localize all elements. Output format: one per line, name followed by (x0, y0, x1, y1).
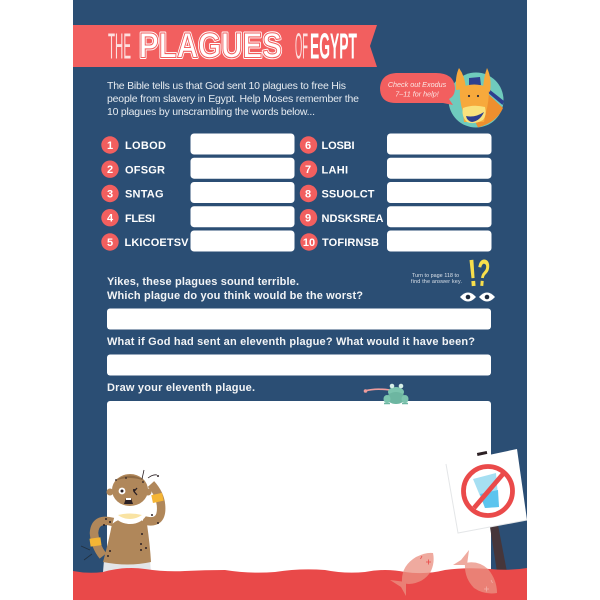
question three: Draw your eleventh plague. (107, 382, 255, 394)
word scramble left column: FLESI (125, 213, 155, 225)
intro text (107, 80, 359, 118)
word scramble left column: LKICOETSV (124, 237, 189, 249)
word scramble right column: LOSBI (322, 140, 354, 152)
intro text: people from slavery in Egypt. Help Moses remember the (107, 93, 359, 105)
word scramble right column: 8 (305, 188, 311, 200)
title banner: PLAGUES (139, 26, 282, 66)
callout: check out Exodus (380, 73, 455, 105)
icon: exclamation and question marks: ! (466, 253, 479, 295)
word scramble right column: 7 (305, 164, 311, 176)
word scramble left column: LOBOD (125, 140, 166, 152)
word scramble left column: OFSGR (125, 164, 165, 176)
word scramble right column (300, 134, 492, 252)
word scramble left column: 4 (107, 213, 114, 225)
icon: exclamation and question marks (466, 253, 492, 296)
word scramble right column: 6 (305, 140, 311, 152)
word scramble left column: 1 (107, 140, 113, 152)
question one: Which plague do you think would be the worst? (107, 290, 363, 302)
word scramble right column: SSUOLCT (322, 189, 375, 201)
character: man with boils (81, 470, 164, 572)
navy page panel (73, 0, 527, 600)
fish right (453, 550, 497, 593)
no water sign (446, 449, 527, 533)
answer key note: Turn to page 118 to (412, 273, 459, 279)
icon: exclamation and question marks: ? (475, 253, 492, 296)
word scramble right column: LAHI (322, 164, 348, 176)
title banner: EGYPT (310, 26, 357, 66)
callout: check out Exodus: Check out Exodus (388, 80, 447, 89)
word scramble left column (101, 134, 294, 252)
title banner: THE (108, 26, 131, 66)
answer box two (107, 354, 491, 376)
fish left (390, 553, 434, 596)
word scramble right column: 10 (303, 237, 315, 249)
word scramble left column: 2 (107, 164, 113, 176)
answer key note: find the answer key. (411, 279, 462, 285)
icon: frog (364, 384, 408, 404)
sign post (490, 525, 507, 572)
intro text: 10 plagues by unscrambling the words below... (107, 106, 315, 118)
question two: What if God had sent an eleventh plague? What would it have been? (107, 336, 475, 348)
question one (107, 276, 363, 302)
word scramble left column: 3 (107, 188, 113, 200)
icon: donkey (448, 68, 504, 128)
answer key note (411, 273, 462, 285)
word scramble left column: 5 (107, 237, 113, 249)
callout: check out Exodus: 7–11 for help! (395, 90, 439, 98)
title banner: PLAGUES (139, 26, 282, 66)
drawing panel (107, 401, 491, 591)
icon: eyes (460, 292, 495, 302)
title banner (73, 25, 377, 67)
red water wave (73, 568, 527, 600)
word scramble right column: NDSKSREA (322, 213, 384, 225)
word scramble right column: 9 (305, 213, 311, 225)
intro text: The Bible tells us that God sent 10 plagues to free His (107, 80, 346, 92)
question one: Yikes, these plagues sound terrible. (107, 276, 299, 288)
answer box one (107, 308, 491, 330)
title banner: OF (295, 26, 308, 66)
word scramble left column: SNTAG (125, 189, 164, 201)
nail (477, 451, 487, 456)
word scramble right column: TOFIRNSB (322, 237, 379, 249)
